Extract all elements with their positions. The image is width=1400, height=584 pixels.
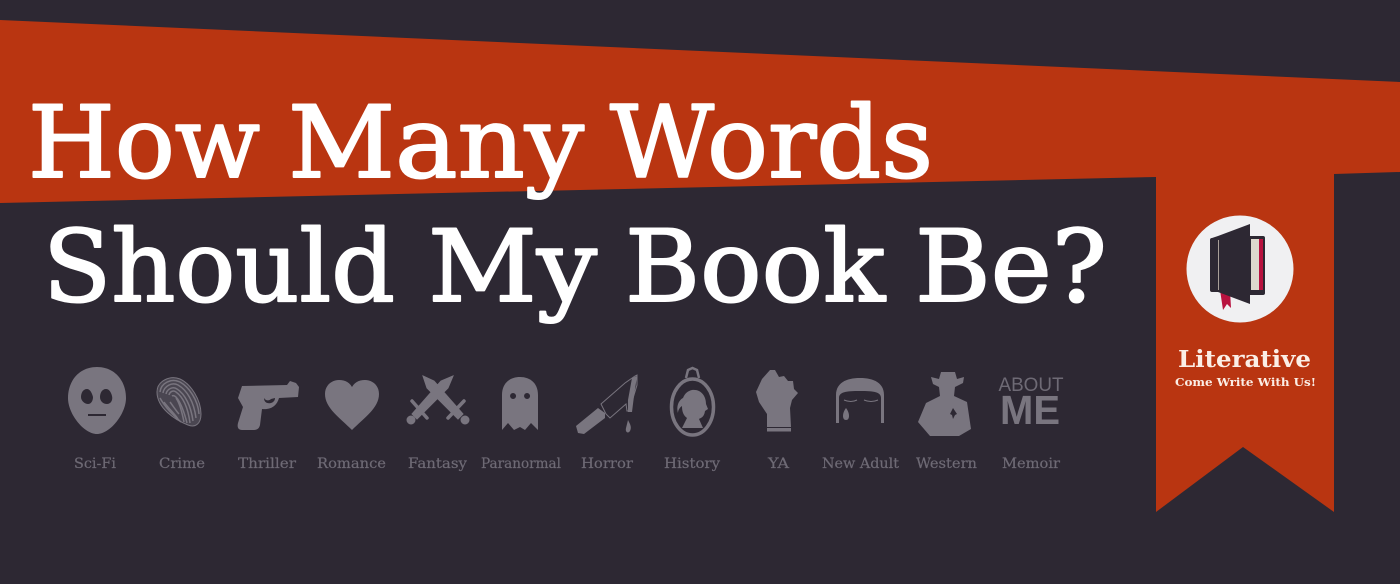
logo name: Literative (1178, 346, 1311, 373)
title line 1: Words (610, 86, 933, 201)
icon: book (1210, 224, 1265, 310)
title line 2 (43, 210, 1107, 325)
title line 2: Should (43, 210, 395, 325)
icon: crossed swords (407, 376, 469, 424)
genre labels: Crime (159, 456, 205, 472)
icon: raised fist (756, 370, 798, 432)
logo badge (1186, 216, 1294, 322)
genre labels: Horror (581, 456, 634, 472)
icon: ghost (502, 377, 538, 430)
genre labels: Thriller (238, 456, 297, 472)
icon: cowboy sheriff (918, 372, 971, 436)
title line 2: Book (625, 210, 886, 325)
icon: bloody knife (576, 375, 637, 434)
title line 2: My (428, 210, 597, 325)
icon: alien (68, 367, 126, 434)
genre labels: Sci-Fi (74, 456, 117, 472)
genre labels: Western (916, 456, 977, 472)
icon: pistol (238, 381, 299, 430)
genre labels: Fantasy (408, 456, 467, 472)
title line 1: Many (288, 86, 584, 201)
genre labels (74, 456, 1061, 472)
genre labels: Paranormal (481, 456, 561, 472)
icon: about me: ABOUT (998, 375, 1064, 396)
icon: cameo locket (672, 368, 714, 435)
title line 2: Be? (915, 210, 1107, 325)
genre labels: Memoir (1002, 456, 1061, 472)
genre labels: Romance (317, 456, 386, 472)
icon: heart (325, 380, 379, 430)
icon: fingerprint (157, 378, 201, 426)
icon: about me: ME (1000, 387, 1060, 433)
genre labels: New Adult (822, 456, 900, 472)
title line 1: How (28, 86, 260, 201)
title line 1 (28, 86, 933, 201)
genre labels: History (664, 456, 720, 472)
icon: woman with tear (836, 378, 884, 423)
genre labels: YA (767, 456, 789, 472)
logo tagline: Come Write With Us! (1175, 375, 1316, 389)
